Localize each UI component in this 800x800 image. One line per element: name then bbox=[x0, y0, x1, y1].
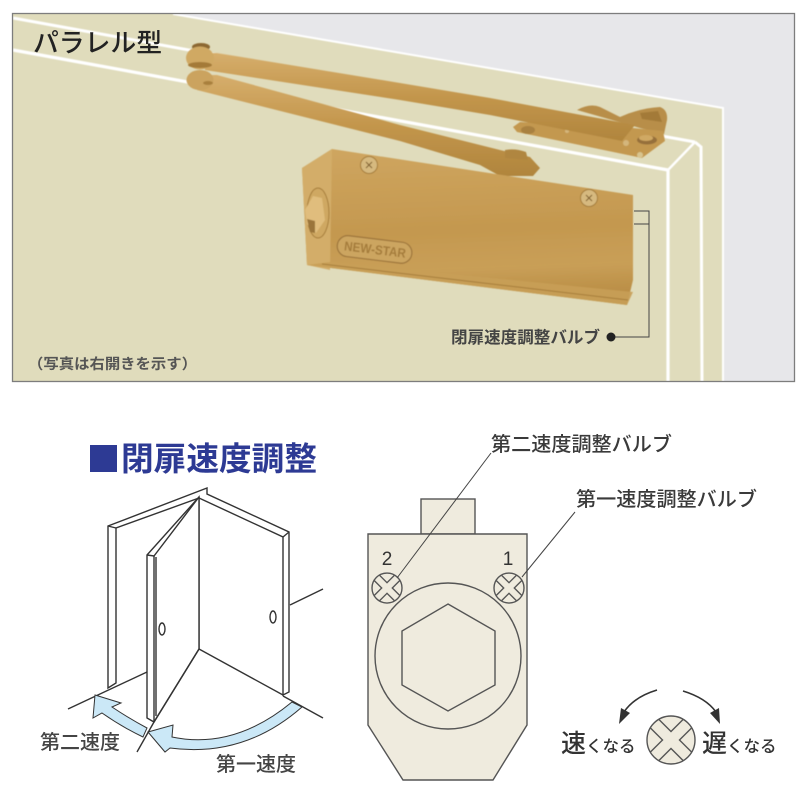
brand plate bbox=[336, 234, 413, 264]
label: faster: 速くなる bbox=[561, 730, 636, 758]
door frame bbox=[108, 488, 289, 695]
photo heading: パラレル型 bbox=[33, 28, 162, 58]
heading text: 閉扉速度調整 bbox=[121, 441, 317, 477]
top tab bbox=[421, 499, 475, 534]
cover screw left bbox=[360, 156, 378, 174]
floor and wall lines bbox=[68, 589, 323, 752]
arrow: faster bbox=[619, 690, 657, 724]
hex socket bbox=[402, 604, 495, 711]
open door leaf bbox=[147, 497, 199, 722]
door closer bbox=[186, 43, 667, 305]
legend: adjustment direction bbox=[561, 690, 777, 773]
valve label: 閉扉速度調整バルブ bbox=[451, 327, 601, 347]
section heading bbox=[90, 441, 317, 477]
label: slower: 遅くなる bbox=[702, 730, 777, 758]
leader: first valve bbox=[522, 512, 575, 577]
label: second speed: 第二速度 bbox=[40, 731, 120, 754]
label: first speed: 第一速度 bbox=[216, 753, 296, 776]
heading square marker bbox=[90, 445, 117, 472]
panel border bbox=[12, 14, 794, 382]
body outline bbox=[368, 534, 527, 780]
wall behind door frame bbox=[173, 14, 794, 381]
right side closer lug bbox=[505, 149, 528, 160]
label: first speed valve: 第一速度調整バルブ bbox=[576, 487, 757, 511]
valve 2 bbox=[366, 567, 408, 609]
cover screw right bbox=[580, 190, 598, 206]
hex socket bbox=[305, 188, 329, 238]
door handle: open leaf bbox=[159, 623, 165, 635]
door frame white edges bbox=[13, 14, 723, 382]
number 2: 2 bbox=[382, 549, 392, 570]
valve recess circle bbox=[375, 583, 521, 729]
upper arm bbox=[186, 43, 635, 141]
door handle: closed leaf bbox=[270, 611, 276, 623]
leader: second valve bbox=[397, 453, 491, 578]
panel: door closer photo bbox=[12, 13, 795, 382]
adjustment screw icon bbox=[638, 707, 704, 773]
arrow: first speed bbox=[148, 702, 302, 752]
diagram: door swing bbox=[68, 488, 323, 752]
arrow: slower bbox=[683, 691, 720, 724]
photo note: （写真は右開きを示す） bbox=[28, 355, 197, 373]
leader lines: closing speed valves bbox=[611, 211, 649, 337]
lower arm bbox=[186, 70, 540, 176]
brand plate: NEW-STAR bbox=[343, 238, 407, 261]
valve 1 bbox=[488, 567, 530, 609]
number 1: 1 bbox=[503, 549, 513, 570]
label: second speed valve: 第二速度調整バルブ bbox=[491, 432, 672, 456]
upper arm hinge bracket bbox=[513, 106, 667, 158]
closer body bbox=[302, 149, 633, 305]
arrow: second speed bbox=[93, 695, 147, 737]
diagram: closer end view bbox=[366, 453, 575, 780]
leader dot bbox=[606, 332, 616, 342]
